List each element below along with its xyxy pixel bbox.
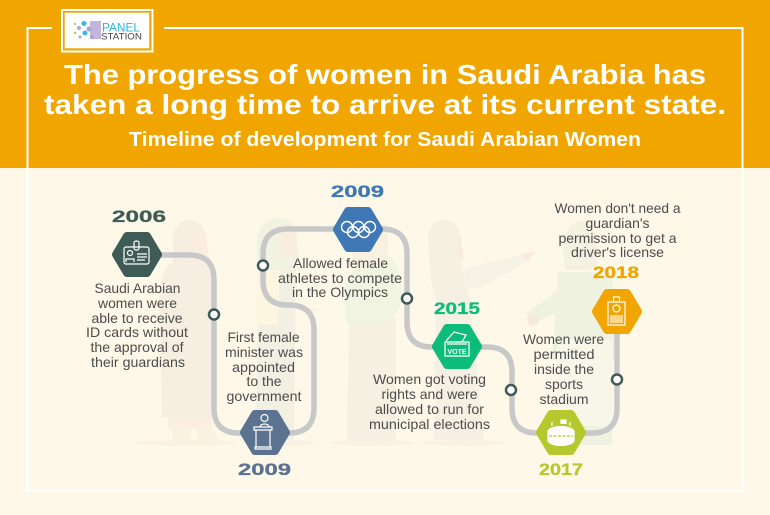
woman 4 (420, 220, 536, 446)
description: Women were (523, 331, 604, 347)
description: minister was (225, 344, 303, 360)
milestone 2015 (369, 299, 490, 432)
description (523, 331, 604, 407)
hexagon icon: ID card (116, 236, 158, 273)
description: government (226, 388, 302, 404)
description: appointed (232, 359, 295, 375)
woman 5 (527, 221, 616, 445)
description: Women got voting (373, 371, 486, 387)
year 2015: 2015 (434, 299, 480, 318)
description: able to receive (92, 310, 183, 326)
milestone 2018 (554, 200, 681, 330)
description: their guardians (91, 354, 185, 370)
logo: Panel Station: STATION (101, 32, 142, 42)
background illustration: five women (135, 218, 616, 446)
woman 1 (135, 220, 235, 446)
logo: Panel Station: PANEL (102, 22, 141, 34)
subtitle: Timeline of development for Saudi Arabian Women (129, 128, 641, 151)
description (554, 200, 681, 260)
timeline path (137, 229, 617, 433)
description (86, 280, 188, 370)
milestone markers (209, 260, 622, 395)
description: stadium (540, 391, 588, 407)
description: guardian's (586, 215, 650, 231)
description: allowed to run for (375, 401, 484, 417)
year 2009: 2009 (238, 460, 291, 479)
hexagon icon: ballot box: VOTE (447, 349, 467, 356)
year 2006: 2006 (112, 207, 166, 226)
hexagon icon: podium (244, 414, 286, 451)
milestone 2009 minister (225, 329, 303, 479)
year 2018: 2018 (593, 263, 639, 282)
description (278, 255, 402, 300)
description: women were (97, 295, 177, 311)
woman 2 (255, 218, 318, 446)
description: inside the (534, 361, 594, 377)
hexagon icon: stadium (540, 414, 582, 451)
description: ID cards without (86, 324, 188, 340)
description: driver's license (571, 244, 664, 260)
year 2017: 2017 (539, 460, 583, 479)
description: rights and were (382, 386, 478, 402)
description: the approval of (90, 339, 184, 355)
description: Women don't need a (554, 200, 681, 216)
description: permission to get a (558, 230, 677, 246)
description: First female (228, 329, 300, 345)
description: Saudi Arabian (94, 280, 180, 296)
title: The progress of women in Saudi Arabia has (64, 59, 706, 90)
description: permitted (534, 346, 594, 362)
description (225, 329, 303, 404)
description: municipal elections (369, 416, 490, 432)
hexagon icon: driver's license form (596, 293, 638, 330)
description: Allowed female (293, 255, 388, 271)
logo: Panel Station (62, 10, 152, 52)
description: to the (246, 373, 282, 389)
milestone 2009 Olympics (278, 182, 402, 300)
description: sports (545, 376, 583, 392)
title: taken a long time to arrive at its current state. (44, 89, 726, 120)
header band (0, 0, 770, 168)
description (369, 371, 490, 432)
title (44, 59, 726, 120)
year 2009: 2009 (331, 182, 384, 201)
milestone 2006 (86, 207, 188, 370)
milestone 2017 (523, 331, 604, 479)
description: athletes to compete (278, 270, 402, 286)
description: in the Olympics (292, 284, 388, 300)
hexagon icon: Olympic rings (337, 211, 379, 248)
woman 3 (330, 225, 414, 446)
